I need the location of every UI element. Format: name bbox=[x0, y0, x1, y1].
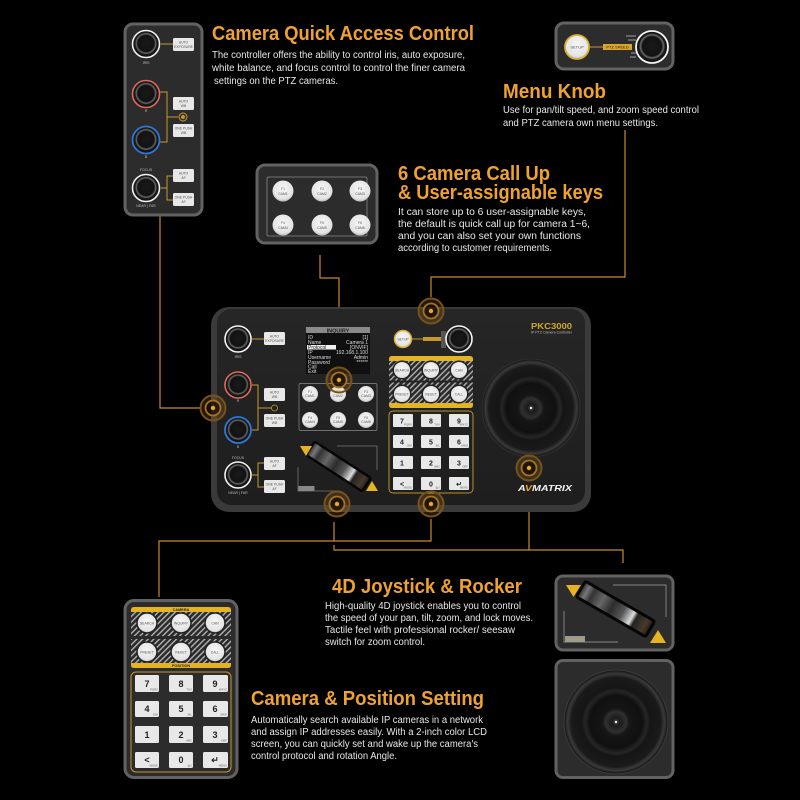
keypad: @,/ bbox=[436, 486, 440, 490]
hotspot markers bbox=[200, 298, 542, 516]
panel: menu knob detail: PTZ SPEED bbox=[606, 44, 629, 50]
panel: camera quick access detail: NEAR | FAR bbox=[136, 204, 156, 208]
panel: camera and position detail: MNO bbox=[220, 712, 228, 716]
keypad: DEF bbox=[462, 464, 468, 468]
panel: camera and position detail: 4 bbox=[144, 704, 150, 714]
panel: camera and position detail: POSITION bbox=[172, 664, 190, 668]
panel: camera quick access detail: AUTO bbox=[179, 172, 189, 176]
heading: camera quick access control: Camera Quick Access Control bbox=[212, 23, 474, 45]
F keys: CAM4 bbox=[305, 420, 315, 424]
text block: camera and position: control protocol and rotation Angle. bbox=[251, 751, 397, 762]
LCD screen: Camera 1 bbox=[346, 340, 368, 346]
panel: camera and position detail: 1 bbox=[144, 730, 150, 740]
setup and pan speed: SETUP bbox=[397, 337, 409, 341]
panel: menu knob detail bbox=[556, 23, 673, 69]
text block: 6 camera: and you can also set your own functions bbox=[398, 231, 581, 242]
panel: joystick detail bbox=[556, 660, 673, 778]
LCD screen: Call bbox=[308, 364, 317, 370]
text block: 4D joystick: the speed of your pan, tilt, zoom, and lock moves. bbox=[325, 613, 533, 624]
panel: rocker detail bbox=[556, 576, 673, 650]
camera and position keys bbox=[389, 356, 473, 408]
panel: 6 camera keys detail: F2 bbox=[320, 187, 324, 191]
panel: camera and position detail: GHI bbox=[153, 712, 158, 716]
knobs: NEAR | FAR bbox=[228, 491, 248, 495]
keypad: 7 bbox=[400, 418, 404, 426]
F keys: CAM5 bbox=[333, 420, 343, 424]
keypad: 8 bbox=[429, 418, 433, 426]
keypad: 2 bbox=[429, 460, 433, 468]
panel: 6 camera keys detail: F6 bbox=[358, 221, 362, 225]
side buttons: WB bbox=[272, 421, 278, 425]
text block: menu knob: Use for pan/tilt speed, and zoom speed control bbox=[503, 105, 699, 116]
keypad: PQRS bbox=[404, 422, 412, 426]
panel: 6 camera keys detail: CAM3 bbox=[355, 192, 365, 196]
keypad: .,: bbox=[410, 464, 412, 468]
knobs: B bbox=[237, 445, 240, 449]
LCD screen: [ONVIF] bbox=[350, 345, 369, 351]
knobs: R bbox=[237, 399, 240, 403]
knobs: IRIS bbox=[235, 355, 242, 359]
keypad: JKL bbox=[435, 444, 440, 448]
panel: camera and position detail: INQUIRY bbox=[174, 621, 189, 625]
text block: camera and position: and assign IP addresses easily. With a 2-inch color LCD bbox=[251, 727, 487, 738]
panel: main controller bbox=[211, 307, 591, 512]
knobs bbox=[225, 326, 278, 495]
brand: PKC3000: PKC3000 bbox=[531, 322, 573, 331]
LCD screen: Username bbox=[308, 355, 331, 361]
text block: 4D joystick bbox=[325, 601, 533, 648]
panel: 6 camera keys detail: CAM5 bbox=[317, 226, 327, 230]
panel: camera and position detail: RESET bbox=[175, 650, 187, 654]
side buttons: ONE PUSH bbox=[266, 482, 284, 486]
panel: camera and position detail: WXYZ bbox=[219, 688, 227, 692]
F keys: F3 bbox=[364, 390, 368, 394]
panel: 6 camera keys detail: CAM4 bbox=[278, 226, 288, 230]
keypad: MNO bbox=[461, 444, 469, 448]
panel: camera quick access detail: ONE PUSH bbox=[175, 196, 193, 200]
side buttons: ONE PUSH bbox=[266, 416, 284, 420]
text block: camera and position: Automatically search available IP cameras in a network bbox=[251, 715, 484, 726]
panel: 6 camera keys detail: F1 bbox=[281, 187, 285, 191]
LCD screen: Name bbox=[308, 340, 322, 346]
panel: camera and position detail: < bbox=[144, 755, 150, 765]
panel: rocker detail: ROCKER bbox=[566, 637, 584, 642]
panel: 6 camera keys detail: F4 bbox=[281, 221, 285, 225]
panel: camera and position detail: ABC bbox=[186, 738, 192, 742]
joystick bbox=[482, 359, 580, 457]
panel: camera quick access detail: R bbox=[145, 109, 148, 113]
text block: camera quick access: settings on the PTZ cameras. bbox=[214, 76, 338, 87]
keypad: 9 bbox=[457, 418, 461, 426]
side buttons: AF bbox=[272, 464, 277, 468]
panel: camera and position detail: 9 bbox=[212, 679, 218, 689]
panel: camera and position detail: CAN bbox=[211, 621, 219, 625]
camera and position keys: RESET bbox=[425, 392, 437, 396]
keypad: 5 bbox=[429, 440, 433, 446]
text block: 6 camera: It can store up to 6 user-assignable keys, bbox=[398, 207, 586, 218]
panel: 6 camera keys detail: CAM6 bbox=[355, 226, 365, 230]
panel: camera and position detail: DEF bbox=[221, 738, 227, 742]
keypad: ↵ bbox=[456, 482, 462, 488]
panel: camera quick access detail: IRIS bbox=[143, 61, 150, 65]
panel: camera quick access detail bbox=[125, 24, 202, 215]
panel: camera and position detail: 6 bbox=[212, 704, 218, 714]
panel: camera and position detail: CAMERA bbox=[173, 608, 190, 612]
brand: AVMATRIX: AVMATRIX bbox=[517, 484, 573, 493]
side buttons: EXPOSURE bbox=[265, 339, 285, 343]
camera and position keys: CAN bbox=[455, 368, 463, 372]
keypad: WXYZ bbox=[460, 422, 468, 426]
side buttons: WB bbox=[272, 395, 278, 399]
panel: camera and position detail: JKL bbox=[187, 712, 192, 716]
LCD screen: [1] bbox=[362, 335, 369, 341]
side buttons: AUTO bbox=[270, 334, 280, 338]
panel: camera and position detail: MODE bbox=[150, 764, 158, 768]
heading: 4D joystick and rocker: 4D Joystick & Rocker bbox=[332, 576, 522, 598]
side buttons: AUTO bbox=[270, 460, 280, 464]
keypad: ABC bbox=[434, 464, 440, 468]
LCD screen: Exit bbox=[308, 369, 317, 375]
panel: camera and position detail: @,/ bbox=[188, 764, 192, 768]
panel: camera and position detail: MENU bbox=[219, 764, 227, 768]
heading: 6 camera call up: 6 Camera Call Up bbox=[398, 163, 550, 185]
LCD screen bbox=[306, 327, 370, 375]
camera and position keys: INQUIRY bbox=[424, 368, 439, 372]
LCD screen: IP bbox=[308, 350, 313, 356]
heading: 6 camera call up: & User-assignable keys bbox=[398, 182, 603, 204]
keypad: MODE bbox=[404, 486, 412, 490]
LCD screen: INQUIRY bbox=[327, 328, 350, 334]
camera and position keys: PRESET bbox=[395, 392, 409, 396]
LCD screen: Protocol bbox=[308, 345, 326, 351]
F keys: CAM3 bbox=[361, 394, 371, 398]
panel: 6 camera keys detail: F3 bbox=[358, 187, 362, 191]
text block: camera and position bbox=[251, 715, 487, 762]
text block: 6 camera: according to customer requirements. bbox=[398, 243, 552, 254]
F keys bbox=[299, 384, 377, 430]
keypad: < bbox=[400, 482, 404, 488]
panel: camera quick access detail: WB bbox=[181, 131, 187, 135]
panel: camera and position detail: 7 bbox=[144, 679, 150, 689]
panel: camera quick access detail: AUTO bbox=[179, 40, 189, 44]
side buttons: AUTO bbox=[270, 390, 280, 394]
keypad: 4 bbox=[400, 440, 404, 446]
keypad: 0 bbox=[429, 482, 433, 488]
F keys: F2 bbox=[336, 390, 340, 394]
text block: menu knob: and PTZ camera own menu settings. bbox=[503, 118, 658, 129]
panel: camera and position detail: 2 bbox=[178, 730, 184, 740]
panel: camera and position detail: ↵ bbox=[211, 755, 219, 765]
panel: camera and position detail: 0 bbox=[178, 755, 184, 765]
panel: 6 camera keys detail: F5 bbox=[320, 221, 324, 225]
panel: camera quick access detail: B bbox=[145, 155, 148, 159]
panel: camera quick access detail: AUTO bbox=[179, 100, 189, 104]
camera and position keys: SEARCH bbox=[395, 368, 410, 372]
panel: camera quick access detail: ONE PUSH bbox=[175, 126, 193, 130]
keypad: 3 bbox=[457, 460, 461, 468]
text block: camera quick access: The controller offers the ability to control iris, auto exposure, bbox=[212, 50, 465, 61]
F keys: F4 bbox=[308, 416, 312, 420]
panel: camera quick access detail: EXPOSURE bbox=[174, 45, 194, 49]
F keys: F1 bbox=[308, 390, 312, 394]
keypad: GHI bbox=[407, 444, 412, 448]
brand: PKC3000 bbox=[531, 322, 573, 334]
panel: menu knob detail: SETUP bbox=[570, 44, 584, 50]
connector lines bbox=[159, 130, 625, 597]
keypad: 1 bbox=[400, 460, 404, 468]
LCD screen: 192.168.1.100 bbox=[336, 350, 368, 356]
panel: camera and position detail: 3 bbox=[212, 730, 218, 740]
F keys: CAM6 bbox=[361, 420, 371, 424]
panel: camera quick access detail: AF bbox=[181, 176, 186, 180]
text block: 6 camera: the default is quick call up for camera 1~6, bbox=[398, 219, 590, 230]
camera and position keys: CALL bbox=[455, 392, 463, 396]
panel: 6 camera keys detail: CAM2 bbox=[317, 192, 327, 196]
heading: 6 camera call up bbox=[398, 163, 603, 204]
panel: camera and position detail: SEARCH bbox=[140, 621, 155, 625]
heading: camera and position setting: Camera & Position Setting bbox=[251, 688, 484, 710]
text block: camera quick access bbox=[211, 50, 465, 87]
knobs: FOCUS bbox=[232, 456, 245, 460]
side buttons bbox=[264, 332, 285, 493]
heading: menu knob: Menu Knob bbox=[503, 81, 606, 103]
panel: camera and position detail: 5 bbox=[178, 704, 184, 714]
panel: camera quick access detail: AF bbox=[181, 200, 186, 204]
text block: 4D joystick: switch for zoom control. bbox=[325, 637, 425, 648]
panel: camera and position detail: 8 bbox=[178, 679, 184, 689]
F keys: CAM2 bbox=[333, 394, 343, 398]
panel: camera and position detail bbox=[125, 600, 237, 778]
LCD screen: Admin bbox=[354, 355, 368, 361]
LCD screen: Password bbox=[308, 360, 330, 366]
keypad: TUV bbox=[434, 422, 440, 426]
LCD screen: ID bbox=[308, 335, 313, 341]
text block: camera quick access: white balance, and focus control to control the finer camera bbox=[211, 63, 465, 74]
panel: camera quick access detail: WB bbox=[181, 104, 187, 108]
F keys: F6 bbox=[364, 416, 368, 420]
panel: camera and position detail: .,: bbox=[156, 738, 158, 742]
keypad bbox=[389, 411, 473, 493]
LCD screen: ****** bbox=[356, 360, 368, 366]
rocker bbox=[298, 442, 378, 491]
brand: PKC3000: IP PTZ Camera Controller bbox=[531, 330, 573, 334]
panel: camera and position detail: TUV bbox=[186, 688, 192, 692]
keypad: MENU bbox=[460, 486, 468, 490]
panel: camera and position detail: PQRS bbox=[150, 688, 158, 692]
text block: 4D joystick: Tactile feel with professional rocker/ seesaw bbox=[325, 625, 516, 636]
panel: camera quick access detail: FOCUS bbox=[140, 168, 153, 172]
F keys: CAM1 bbox=[305, 394, 315, 398]
keypad: 6 bbox=[457, 440, 461, 446]
panel: 6 camera keys detail: CAM1 bbox=[278, 192, 288, 196]
panel: camera and position detail: PRESET bbox=[140, 650, 154, 654]
text block: 4D joystick: High-quality 4D joystick enables you to control bbox=[325, 601, 521, 612]
panel: 6 camera keys detail bbox=[257, 165, 377, 243]
text block: 6 camera bbox=[398, 207, 590, 254]
panel: camera and position detail: CALL bbox=[211, 650, 219, 654]
side buttons: AF bbox=[272, 487, 277, 491]
text block: camera and position: screen, you can quickly set and wake up the camera's bbox=[251, 739, 478, 750]
F keys: F5 bbox=[336, 416, 340, 420]
text block: menu knob bbox=[503, 105, 699, 129]
setup and pan speed bbox=[394, 326, 472, 352]
